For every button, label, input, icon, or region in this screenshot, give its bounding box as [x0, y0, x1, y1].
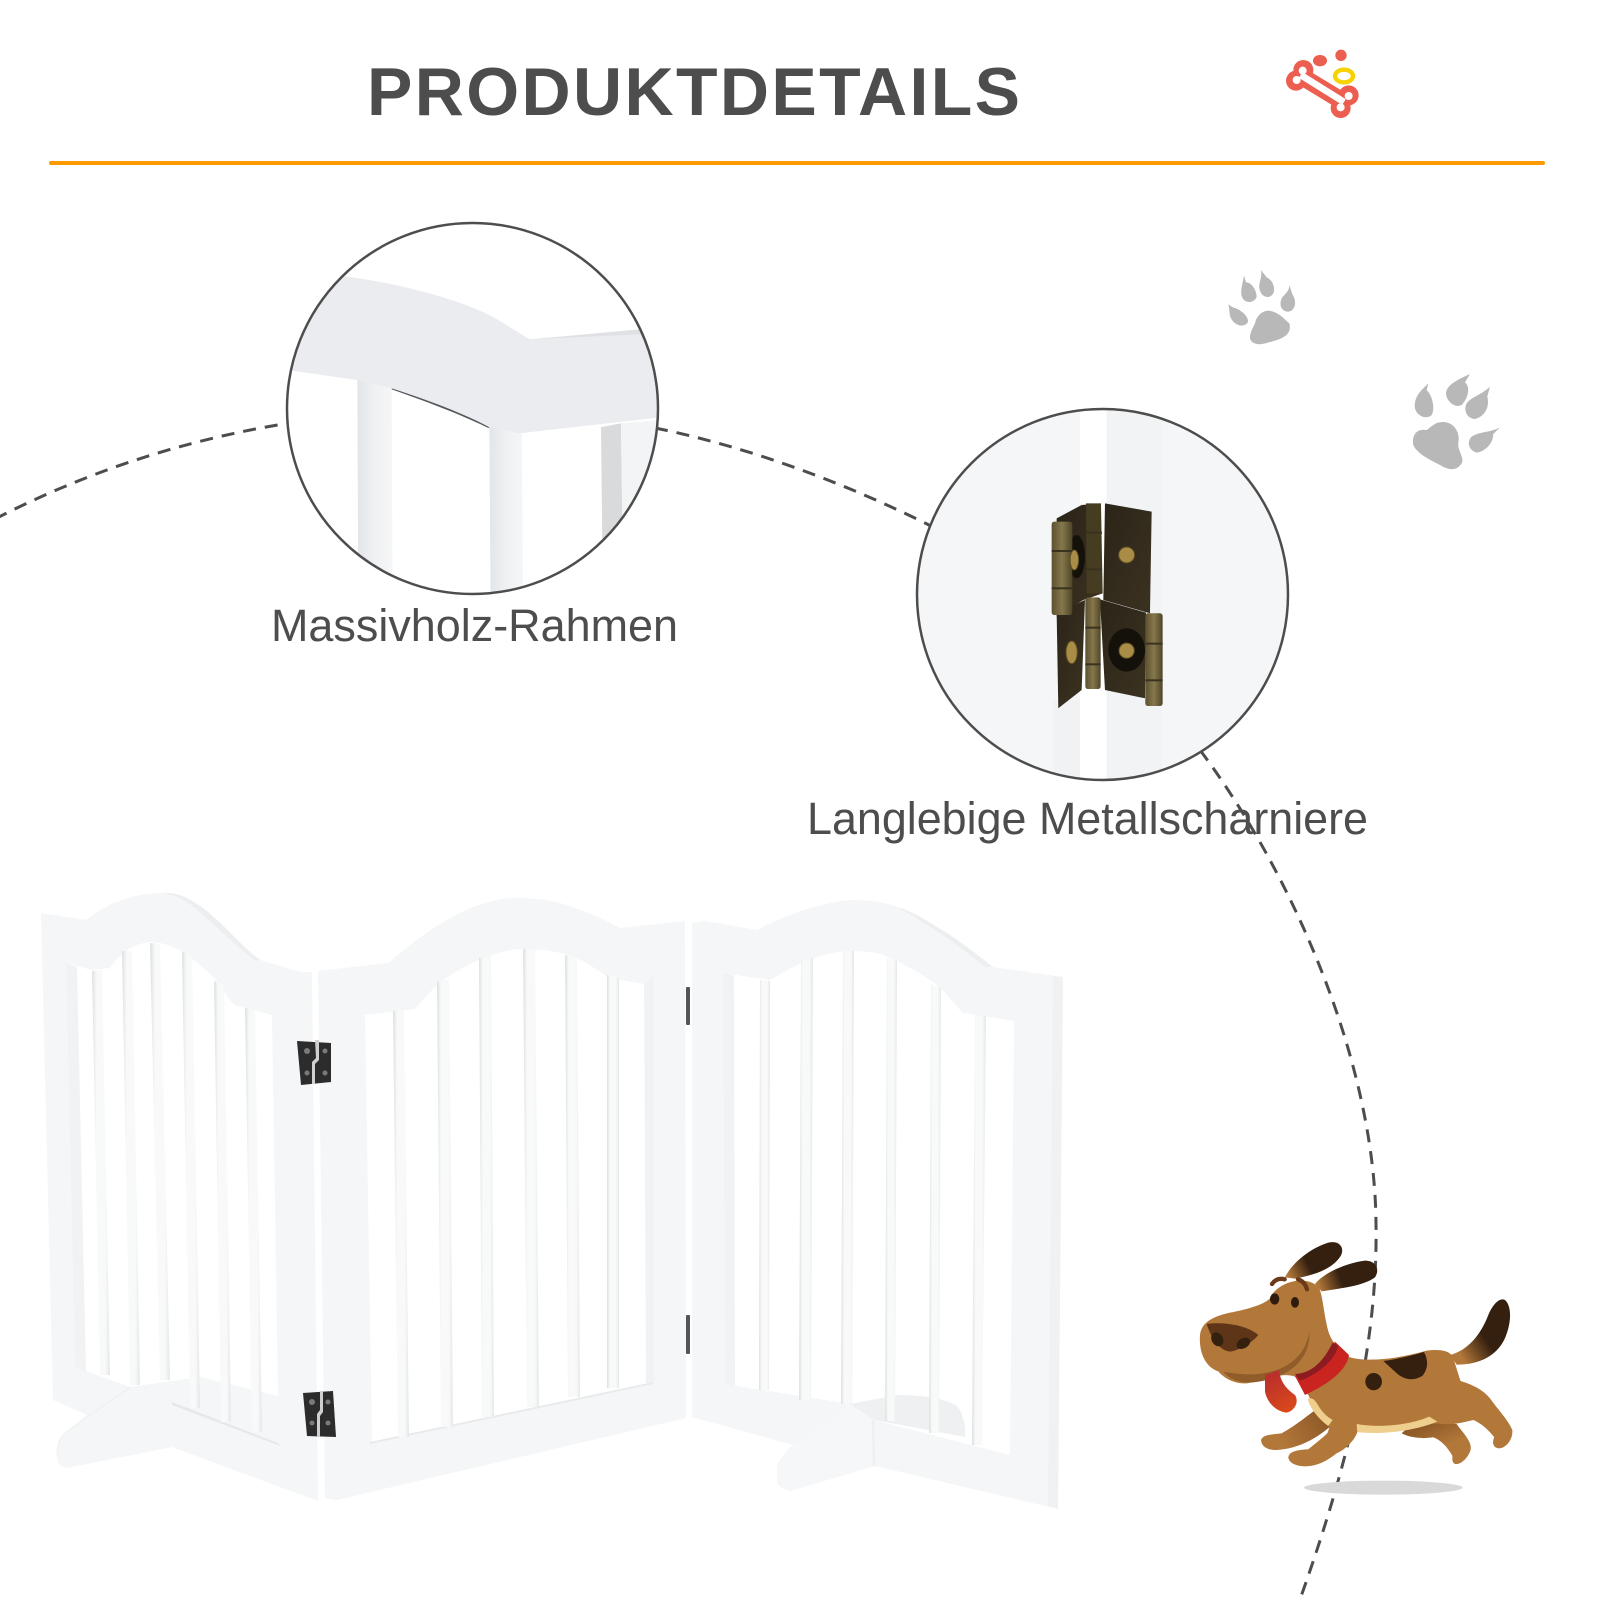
gate panel left: [41, 893, 318, 1501]
far front leg: [1261, 1407, 1333, 1450]
collar: [1295, 1342, 1349, 1395]
ground shadow: [1304, 1481, 1463, 1495]
panel: detail circle wooden frame: [280, 223, 667, 610]
hinge top left: [297, 1040, 331, 1085]
photo: antique brass hinges: [1052, 400, 1163, 800]
label: Langlebige Metallscharniere: Langlebige Metallscharniere: [807, 793, 1368, 844]
gate panel right: [692, 900, 1063, 1509]
icon: large paw print: [1413, 374, 1500, 469]
orange divider line: [49, 161, 1545, 165]
mouth shading: [1223, 1330, 1309, 1382]
ears: [1285, 1242, 1377, 1291]
circle outline: [287, 223, 658, 594]
product photo: three-panel folding gate: [41, 893, 1063, 1509]
hinge bottom right: [686, 1315, 690, 1354]
hinge top right: [686, 987, 690, 1025]
tail: [1450, 1299, 1510, 1365]
belly marking: [1308, 1398, 1437, 1433]
icon: small paw print: [1228, 270, 1295, 344]
hind leg: [1402, 1423, 1471, 1464]
body spots: [1365, 1352, 1427, 1390]
illustration: running dog: [1200, 1242, 1512, 1495]
tongue: [1265, 1370, 1297, 1413]
icon: bone with dots: [1286, 50, 1359, 118]
dashed connector path: [0, 423, 1376, 1600]
gate panel middle: [318, 898, 686, 1500]
label: Massivholz-Rahmen: Massivholz-Rahmen: [271, 600, 678, 651]
title: PRODUKTDETAILS: [367, 54, 1020, 130]
eyes and brows: [1270, 1279, 1307, 1308]
photo: top rail and spindles: [292, 276, 657, 592]
body and head: [1200, 1281, 1512, 1466]
panel: detail circle metal hinge: [917, 400, 1288, 800]
hinge bottom left: [303, 1391, 336, 1437]
nose: [1207, 1323, 1258, 1352]
circle outline: [917, 409, 1288, 780]
